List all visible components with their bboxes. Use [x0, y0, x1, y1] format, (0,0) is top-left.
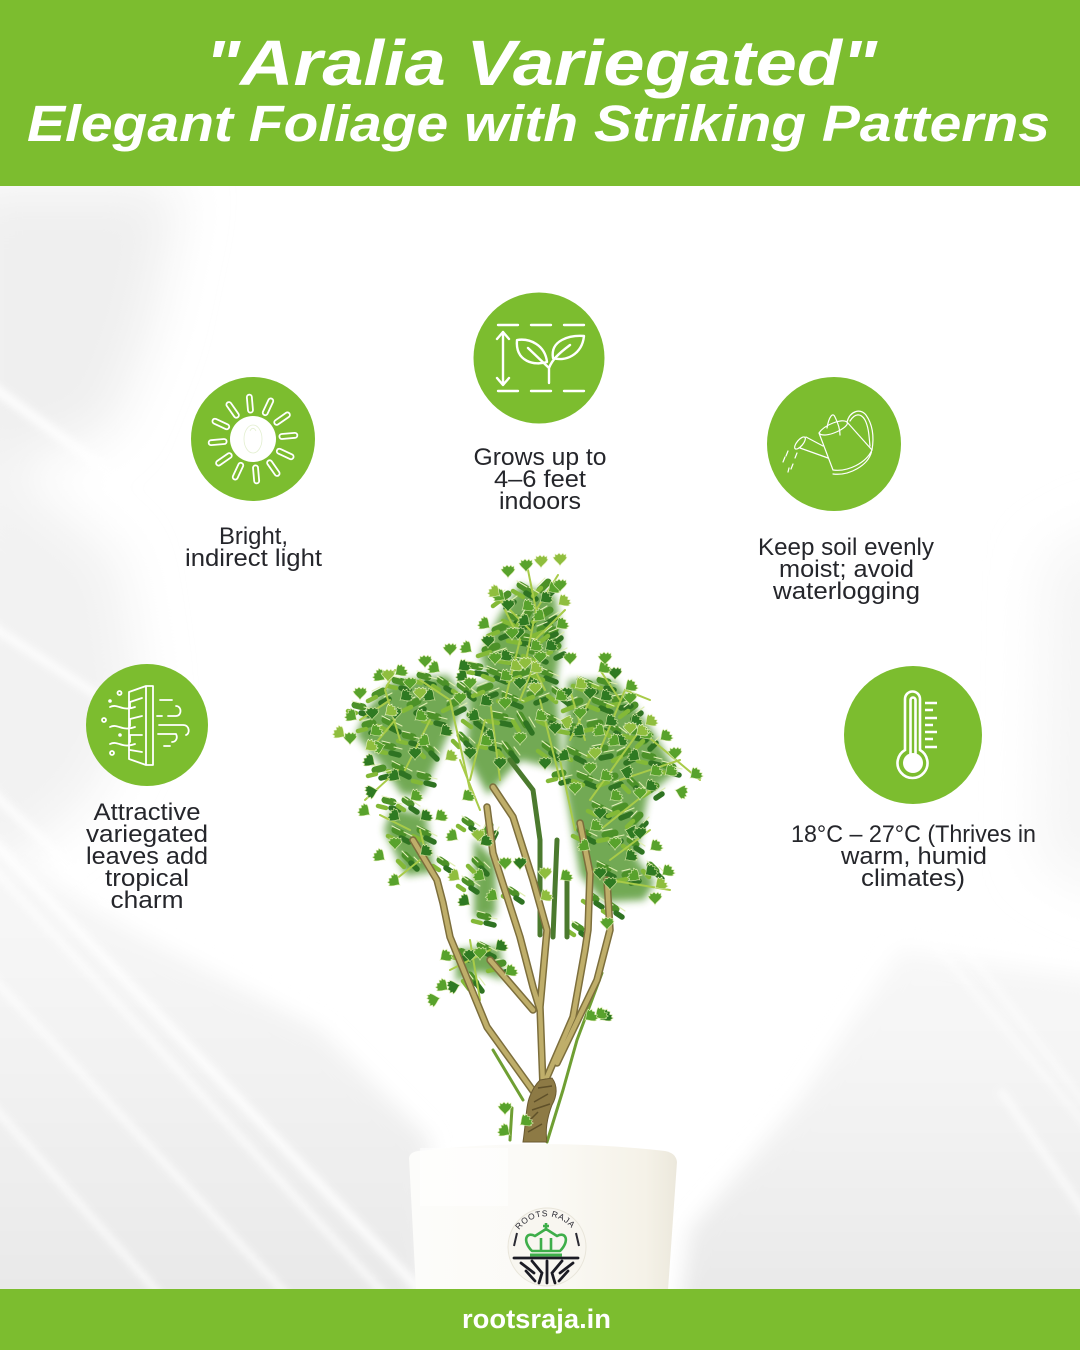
title: "Aralia Variegated"	[205, 27, 878, 99]
header band	[0, 0, 1080, 186]
text: foliage: tropical	[105, 865, 189, 892]
icon: air filter	[86, 664, 208, 786]
text: water	[758, 534, 934, 605]
text: temperature: climates)	[861, 865, 965, 892]
pot	[409, 1144, 677, 1289]
text: height	[474, 444, 606, 515]
text: light: indirect light	[185, 545, 322, 572]
pot: body	[409, 1144, 677, 1290]
icon: watering can	[767, 377, 901, 511]
text: water: Keep soil evenly	[758, 534, 934, 561]
text: foliage: Attractive	[94, 799, 200, 826]
pot: Roots Raja sticker	[508, 1208, 586, 1286]
plant: mid leaves	[342, 559, 705, 1141]
pot: Roots Raja sticker: ROOTS RAJA	[515, 1210, 574, 1230]
plant: trunk	[523, 1078, 556, 1142]
text: height: indoors	[499, 488, 581, 515]
text: light	[185, 523, 322, 572]
text: temperature	[791, 821, 1036, 892]
text: foliage: charm	[110, 887, 184, 914]
text: foliage: leaves add	[86, 843, 208, 870]
text: height: Grows up to	[474, 444, 606, 471]
footer website: rootsraja.in	[462, 1304, 611, 1334]
text: temperature: warm, humid	[840, 843, 987, 870]
plant: pale young leaves	[330, 553, 670, 906]
icon: sun	[191, 377, 315, 501]
plant: twigs	[360, 570, 700, 1000]
text: water: waterlogging	[772, 578, 920, 605]
text: water: moist; avoid	[779, 556, 914, 583]
subtitle: Elegant Foliage with Striking Patterns	[27, 95, 1050, 152]
icon: height and sprout	[474, 292, 604, 424]
plant: dark leaves	[360, 589, 660, 1026]
text: light: Bright,	[219, 523, 288, 550]
plant: foliage mass	[348, 578, 682, 991]
footer band	[0, 1289, 1080, 1350]
plant: thin green stems	[493, 973, 602, 1142]
text: temperature: 18°C – 27°C (Thrives in	[791, 821, 1036, 848]
text: height: 4–6 feet	[494, 466, 586, 493]
plant: dark stems	[510, 760, 567, 937]
plant: woody branches	[413, 787, 610, 1095]
icon: thermometer	[844, 666, 982, 804]
plant: soft foliage underlay	[356, 585, 676, 982]
pot: paper patch	[420, 1148, 508, 1206]
text: foliage: variegated	[86, 821, 208, 848]
text: foliage	[86, 799, 208, 914]
plant	[330, 553, 705, 1142]
